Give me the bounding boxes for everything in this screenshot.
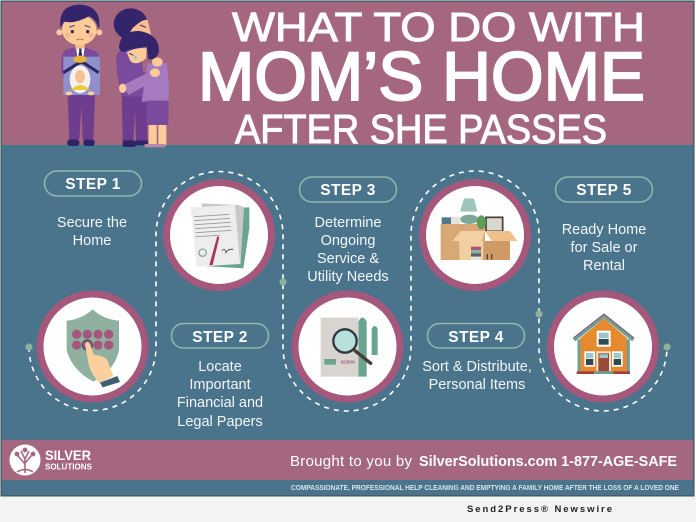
logo: Silver Solutions <box>10 444 93 476</box>
step 5 block: for Sale or <box>571 240 638 256</box>
footer contact line: Brought to you by <box>290 453 412 470</box>
credit: Send2Press Newswire: Send2Press® Newswire <box>467 504 612 515</box>
step 2 icon: signed documents <box>166 182 272 288</box>
step 5 block: Rental <box>583 258 625 274</box>
step 1 block: Secure the <box>57 215 127 231</box>
step 4 block: Sort & Distribute, <box>422 359 532 375</box>
footer contact line <box>290 453 677 470</box>
step 2 block: Legal Papers <box>177 414 263 430</box>
footer banner <box>2 440 693 480</box>
step 5 block <box>556 177 652 274</box>
step 3 icon: bill under magnifier <box>295 294 400 399</box>
title <box>198 4 645 152</box>
logo: Silver Solutions: SOLUTIONS <box>45 462 93 472</box>
logo: Silver Solutions: SILVER <box>45 447 91 463</box>
title: WHAT TO DO WITH <box>232 4 645 50</box>
step 5 icon: house <box>550 294 656 399</box>
step 3 icon: bill under magnifier: $1500 <box>341 360 355 366</box>
step 4 block: STEP 4 <box>448 329 504 346</box>
step 5 block: STEP 5 <box>576 182 632 199</box>
step 2 block <box>172 324 268 430</box>
footer contact line: SilverSolutions.com 1-877-AGE-SAFE <box>419 453 677 470</box>
step 4 icon: moving boxes <box>422 182 528 288</box>
step 3 block: Determine <box>315 215 381 231</box>
panel: header banner <box>2 2 693 147</box>
step 3 block <box>300 177 396 285</box>
illustration: man holding portrait <box>56 5 102 146</box>
illustration: mother and daughter hugging <box>114 8 169 147</box>
step 3 block: Utility Needs <box>307 269 389 285</box>
step 1 icon: shield keypad <box>40 294 145 399</box>
title: AFTER SHE PASSES <box>235 106 607 152</box>
step 3 block: Service & <box>317 251 379 267</box>
step 4 block: Personal Items <box>429 377 525 393</box>
step 2 block: Financial and <box>177 395 263 411</box>
step 3 block: Ongoing <box>321 233 375 249</box>
step 1 block: STEP 1 <box>65 176 121 193</box>
title: MOM’S HOME <box>198 38 645 115</box>
footer tagline: COMPASSIONATE, PROFESSIONAL HELP CLEANING AND EMPTYING A FAMILY HOME AFTER THE LOSS OF A LOVED ONE <box>291 485 679 492</box>
step 2 block: Important <box>189 377 251 393</box>
dashed connector path <box>25 171 671 411</box>
step 4 block <box>422 324 532 393</box>
step 2 block: Locate <box>198 359 242 375</box>
step 2 block: STEP 2 <box>192 329 248 346</box>
step 1 block <box>44 171 142 249</box>
step 3 block: STEP 3 <box>320 182 376 199</box>
step 5 block: Ready Home <box>562 222 646 238</box>
step 1 block: Home <box>73 233 111 249</box>
